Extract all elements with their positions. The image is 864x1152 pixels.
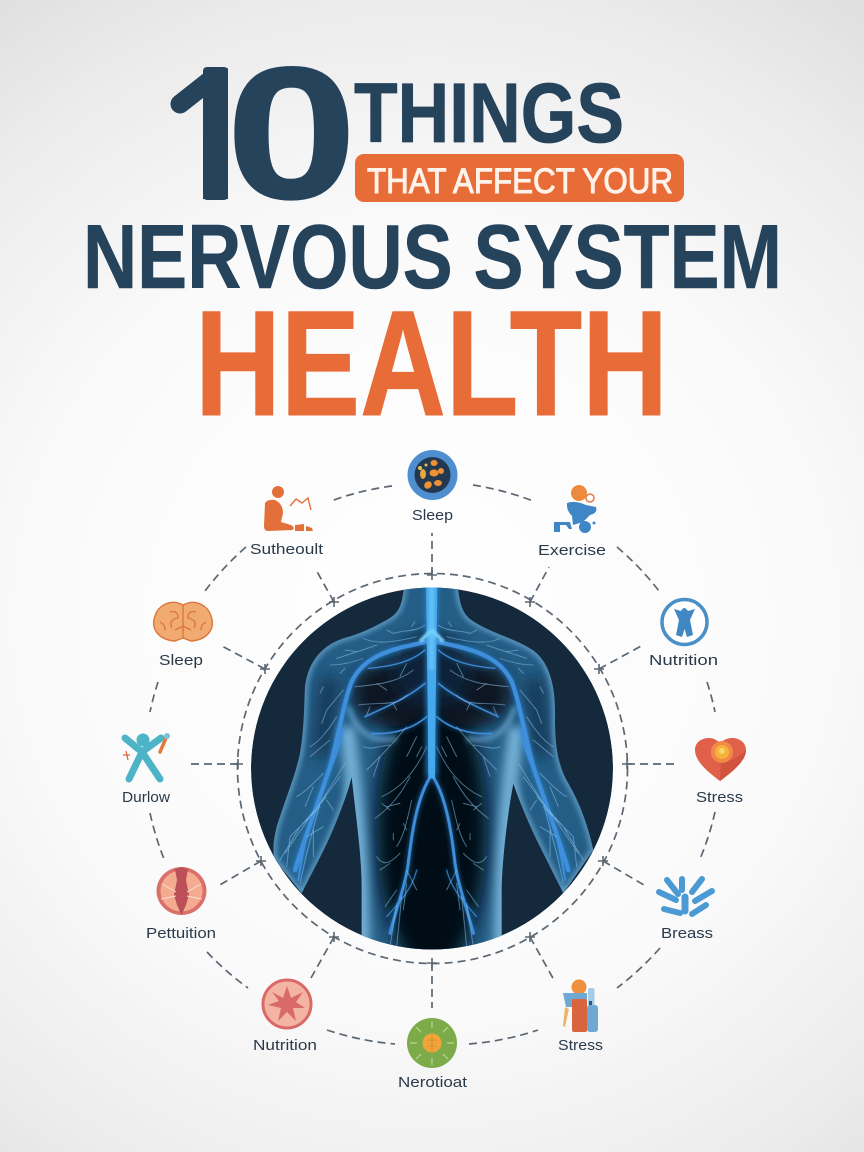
icon: seated person: [264, 486, 313, 531]
factor: Pettuition: [146, 867, 216, 942]
factor: Durlow: [122, 733, 170, 806]
factor: Sutheoult: [250, 486, 324, 558]
factor: Sleep (top): [408, 450, 458, 524]
label: Nerotioat: [398, 1074, 468, 1091]
icon: brain: [154, 602, 212, 641]
factor: Breass: [659, 879, 713, 942]
icon: standing figure blocks: [563, 980, 598, 1032]
body silhouette: [274, 588, 594, 950]
orange badge: that affect your: THAT AFFECT YOUR: [367, 162, 673, 201]
outer dashed arcs between factors: [150, 485, 715, 1044]
title number: 10: 1: [161, 28, 267, 240]
label: Stress: [558, 1037, 603, 1054]
icon: red cross-section: [263, 980, 311, 1028]
label: Sleep: [159, 652, 203, 669]
icon: teal figure: [123, 733, 170, 779]
factor: Stress (right): [695, 738, 746, 806]
title number: 10: [170, 66, 348, 201]
icon: kidney section: [156, 867, 206, 915]
label: Pettuition: [146, 925, 216, 942]
label: Nutrition: [649, 652, 718, 669]
factor: Nutrition (right): [649, 600, 718, 669]
factor: Nutrition (bottom left): [253, 980, 317, 1054]
icon: blue radial capsules: [659, 879, 712, 914]
title line: health: HEALTH: [195, 279, 668, 447]
inner dashed ring with spokes: [187, 533, 679, 1008]
icon: heart: [695, 738, 746, 781]
label: Breass: [661, 925, 713, 942]
factor: Nerotioat: [398, 1018, 468, 1091]
label: Sleep: [412, 507, 453, 524]
icon: figure in ring: [662, 600, 707, 644]
label: Sutheoult: [250, 541, 324, 558]
factor: Sleep (left): [154, 602, 212, 669]
nerve network: [280, 587, 583, 947]
icon: food plate: [408, 450, 458, 500]
title word: THINGS: THINGS: [354, 66, 624, 160]
title number: 10: 0: [226, 28, 357, 238]
label: Durlow: [122, 789, 170, 806]
title block: [88, 66, 778, 416]
central illustration: human nervous system: [251, 588, 613, 950]
icon: green circle: [407, 1018, 457, 1068]
factor: Exercise: [538, 485, 606, 559]
label: Exercise: [538, 542, 606, 559]
label: Stress: [696, 789, 743, 806]
icon: exercise figure: [554, 485, 596, 533]
label: Nutrition: [253, 1037, 317, 1054]
factor: Stress (bottom right): [558, 980, 603, 1054]
